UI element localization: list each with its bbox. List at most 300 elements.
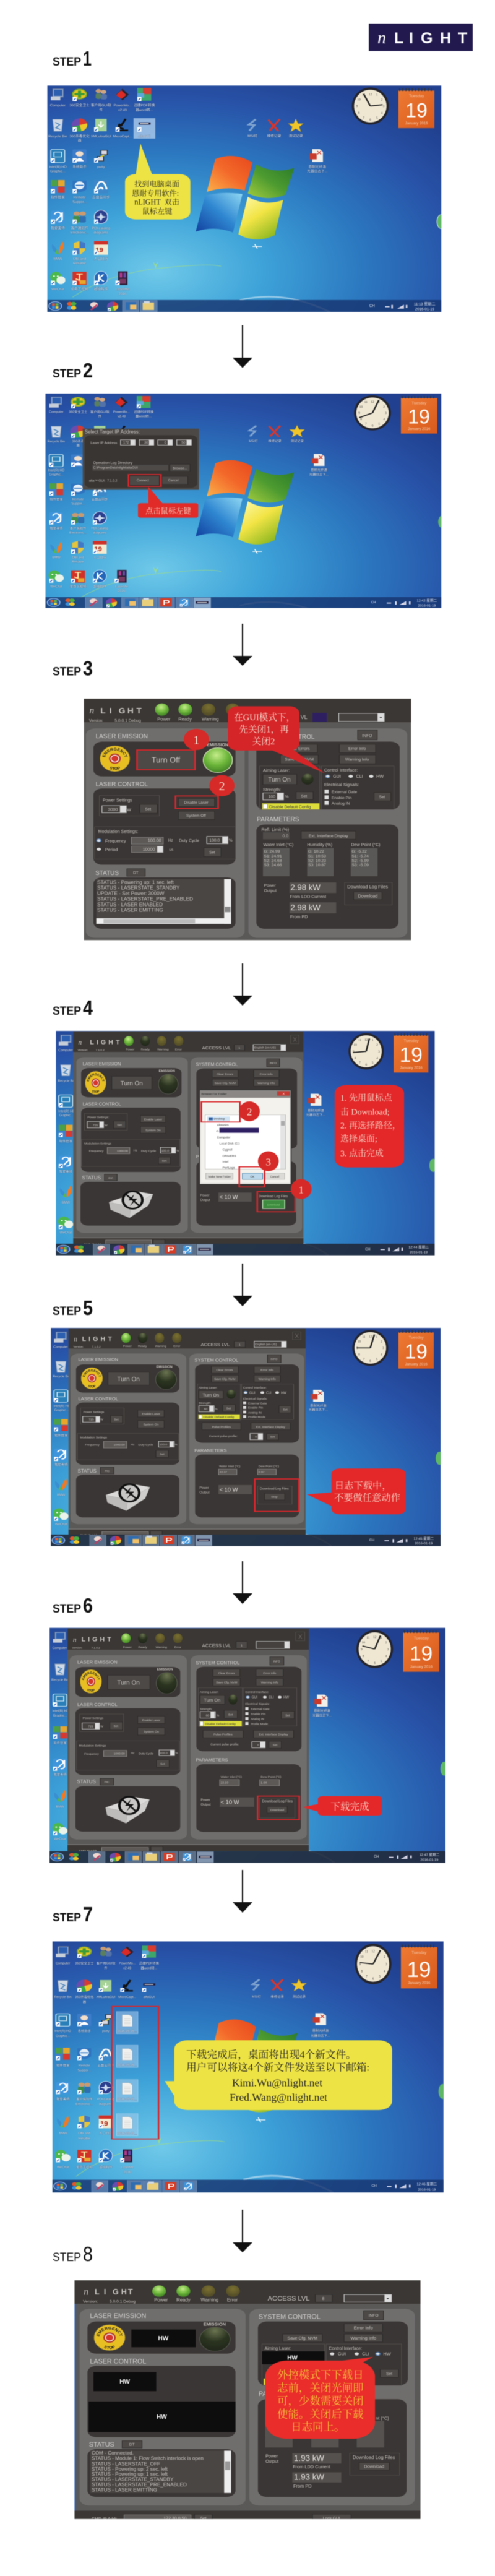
panel: parameters: Power (264, 884, 276, 888)
panel: laser control: Hz (168, 838, 173, 843)
panel: laser control: Enable Laser (142, 1413, 160, 1416)
panel: laser control: Power Settings (83, 1717, 104, 1720)
screenshot: step 3 laser GUI (84, 699, 411, 940)
panel: parameters: From PD (290, 915, 308, 920)
panel: left column (71, 1353, 186, 1524)
arrow 3 (233, 963, 252, 1006)
calendar: Tuesday (411, 401, 427, 405)
desktop icons column: 光器日志下... (312, 1713, 332, 1718)
panel: laser emission (81, 1061, 181, 1097)
panel: status log: STATUS - LASERSTATE_STANDBY (97, 885, 180, 890)
GUI bottom strip: 172.30.0.50 (163, 2517, 187, 2521)
panel: system control: External Gate (248, 1402, 267, 1405)
panel: laser control: 1000.00 (114, 1752, 125, 1756)
desktop icon labels: 云盘云同步 (98, 2062, 114, 2067)
desktop icon labels: PowerMo... (114, 104, 132, 108)
dialog: browse for folder: Browse For Folder (202, 1093, 227, 1096)
panel: laser control: Set (160, 1453, 165, 1457)
dialog: select target IP address: Laser IP Address (90, 441, 118, 445)
desktop icon labels: 客户用GUI软 (91, 103, 111, 108)
callout: red downloading warning (307, 1468, 406, 1514)
panel: laser emission: LASER EMISSION (79, 1357, 118, 1363)
panel: laser control: Set (160, 1762, 165, 1766)
desktop icon labels: 2016 (124, 2171, 131, 2174)
step label 6: STEP (53, 1603, 81, 1616)
panel: laser control: System Off (186, 814, 206, 818)
calendar: 19 (405, 1341, 428, 1364)
step label 8: 8 (83, 2242, 93, 2265)
desktop icon labels: 爱奇艺视频 (76, 2165, 93, 2169)
desktop icon labels: 超级软件 (99, 2165, 113, 2169)
panel: parameters: Output (264, 889, 277, 894)
panel: system control: Set (228, 1713, 233, 1717)
taskbar: CH (372, 2184, 377, 2188)
desktop icon labels: putty (102, 2030, 110, 2033)
panel: system control: CLI (356, 774, 363, 779)
panel: status log: STATUS - LASERSTATE_PRE_ENABLED (97, 896, 193, 902)
icon: windows logo (72, 460, 330, 618)
dialog: select target IP address: 30 (144, 441, 148, 445)
panel: system control: Aiming Laser: (265, 2346, 291, 2351)
panel: laser control: W (100, 1418, 103, 1422)
panel: laser control: HW (157, 2414, 167, 2421)
desktop icon labels: Remote (74, 196, 86, 200)
panel: laser control: % (176, 1752, 178, 1755)
taskbar (51, 1535, 441, 1546)
panel: parameters: Output (200, 1199, 210, 1202)
marker 2: 2 (219, 780, 225, 793)
panel: system control: 100 (269, 795, 275, 799)
dialog: select target IP address: 172 (123, 441, 129, 445)
marker 1 (291, 1179, 312, 1199)
panel: system control: Strength: (263, 788, 281, 793)
panel: left column (76, 1057, 188, 1233)
step label 1: 1 (83, 47, 92, 70)
screenshot: step 2 desktop with dialog (45, 394, 446, 618)
panel: parameters: < 10 W (220, 1194, 238, 1200)
taskbar: CH (365, 1247, 370, 1251)
desktop icon labels: Intel(R) HD (48, 469, 64, 473)
top bar: ACCESS LVL (202, 1045, 231, 1051)
desktop icons column: Computer (58, 1049, 73, 1053)
desktop icon labels: LaserMe (115, 585, 128, 588)
desktop icons column (58, 1035, 325, 1234)
step label 6: 6 (83, 1594, 93, 1617)
top bar: Warning (157, 1048, 169, 1051)
panel: laser control: System On (144, 1730, 159, 1734)
taskbar: CH (374, 1855, 379, 1859)
panel: parameters: S2: -5.99 (351, 859, 369, 863)
panel: system control: Turn On (203, 1392, 219, 1398)
panel: laser emission: EMISSION (207, 743, 228, 747)
clock (352, 87, 389, 124)
dialog: select target IP address: alta™ GUI: 7.1.0.2 (89, 479, 118, 483)
panel: system control: Set (301, 795, 307, 799)
panel: system control: SYSTEM CONTROL (194, 1358, 238, 1363)
panel: status log: STATUS (95, 870, 119, 877)
taskbar: 2016-01-19 (415, 308, 434, 312)
desktop icons column: 软件管家 (53, 1740, 67, 1745)
panel: parameters (196, 1154, 296, 1226)
step label 8 (53, 2242, 93, 2265)
panel: system control: INFO (273, 1660, 280, 1663)
calendar (401, 396, 437, 434)
panel: laser control: 100.00 (148, 838, 161, 843)
new files highlighted (112, 2007, 158, 2139)
top bar: 7.1.0.2 (96, 1049, 105, 1052)
panel: system control: Warning Info (259, 1377, 276, 1381)
desktop icon labels: 我爱美师 (56, 2096, 70, 2101)
desktop icon labels: 2016 (118, 589, 125, 593)
desktop icon labels: 软件管家 (51, 195, 65, 200)
desktop icons column: Intel(R) HD (53, 1710, 69, 1713)
panel: system control: Clear Errors (287, 747, 310, 751)
callout: yellow send files by email: Kimi.Wu@nlight.net (232, 2077, 322, 2089)
desktop icon labels: Reliable (73, 262, 86, 265)
panel: parameters: PARAMETERS (259, 2390, 304, 2398)
screenshot: step 1 desktop (48, 85, 446, 312)
desktop icon labels: diagrams (94, 231, 108, 235)
taskbar: 2016-01-19 (418, 2188, 436, 2192)
desktop icon labels: 恩耐光纤激 (309, 164, 326, 169)
desktop icon labels: 爱奇艺视频 (70, 584, 87, 588)
panel: laser control: % (229, 838, 233, 843)
panel: system control: Aiming Laser: (263, 768, 290, 773)
arrow 4 (233, 1264, 252, 1306)
desktop icons column: 软件管家 (59, 1139, 73, 1144)
dialog: browse for folder: PerfLogs (223, 1166, 235, 1170)
desktop icon labels: alfaGUI (144, 1996, 155, 1999)
desktop icons column (53, 1332, 328, 1527)
desktop icon labels: Reliable (79, 2137, 90, 2140)
panel: system control: Set (386, 2372, 392, 2376)
top bar: ACCESS LVL (202, 1643, 231, 1648)
desktop gadget (436, 1452, 443, 1465)
dialog: browse for folder: Cygnol (223, 1148, 232, 1152)
callout: yellow find software: 鼠标左键 (142, 207, 172, 216)
desktop icon labels: Electronic... (75, 2103, 93, 2106)
calendar: Tuesday (409, 94, 424, 98)
callout: red download complete: 下载完成 (330, 1801, 369, 1812)
top bar: n (89, 705, 94, 716)
desktop icon labels: Recycle Bin (48, 440, 65, 444)
top bar (74, 2280, 421, 2304)
GUI bottom strip: CMD IP Addr (84, 1243, 102, 1247)
dialog: browse for folder: OK (251, 1175, 255, 1178)
callout: yellow send files by email (165, 2040, 392, 2110)
panel: laser control (81, 1101, 181, 1172)
desktop icon labels: OBI and (78, 2132, 90, 2135)
panel: system control: INFO (369, 2314, 379, 2318)
callout: red downloading warning: 不要做任意动作 (334, 1493, 400, 1504)
marker 2 (209, 775, 235, 796)
panel: system control: Electrical Signals: (245, 1702, 270, 1706)
desktop icon labels: Remote (79, 2064, 90, 2067)
taskbar: CH (369, 304, 375, 308)
step label 7: 7 (83, 1903, 93, 1926)
panel: parameters: Water Inlet (°C) (221, 1775, 242, 1779)
desktop icon labels: WeChat (51, 288, 64, 291)
desktop icon labels: diagrams (93, 531, 107, 535)
panel: system control: GUI (252, 1696, 257, 1700)
panel: status: STATUS (82, 1175, 101, 1181)
panel: laser control: Frequency (105, 838, 126, 843)
callout: yellow find software: 恩耐专用软件: (132, 188, 179, 197)
panel: parameters: 0.97 (259, 1471, 265, 1475)
top bar: ACCESS LVL (268, 2295, 309, 2302)
dialog: select target IP address: 0 (165, 441, 166, 445)
panel: system control: Strength: (199, 1402, 211, 1405)
top bar: n (79, 1039, 82, 1046)
desktop icon labels: LaserMe (116, 288, 129, 291)
panel: laser control: Hz (134, 1149, 137, 1153)
calendar (403, 1630, 439, 1672)
desktop icons column: Graphic... (53, 1714, 67, 1718)
step label 8: STEP (53, 2251, 81, 2264)
desktop icons column: Computer (53, 1647, 67, 1650)
panel: parameters: 22.37 (220, 1471, 227, 1475)
panel: parameters: 22.10 (221, 1781, 228, 1785)
panel: system control: Electrical Signals: (243, 1397, 267, 1401)
top bar: LIGHT (90, 1040, 123, 1046)
dialog: browse for folder (199, 1090, 291, 1187)
desktop icon labels: PDI catalog (97, 2098, 114, 2101)
panel: status: STATUS (77, 1779, 96, 1785)
panel: laser control: Period (105, 847, 118, 852)
marker 3 (258, 1152, 279, 1171)
logo: nLIGHT (369, 24, 473, 51)
calendar (398, 1330, 434, 1369)
panel: parameters: Download Log Files (353, 2455, 395, 2460)
panel: parameters: 0.0 (283, 834, 288, 838)
desktop icon labels: 360杀毒优化 (75, 1994, 94, 1999)
dialog: browse for folder: Desktop (213, 1118, 225, 1121)
step label 5 (53, 1296, 93, 1319)
panel: parameters: Stop (271, 1496, 278, 1499)
panel: right column (189, 1353, 304, 1524)
panel: laser emission: LASER EMISSION (90, 2312, 146, 2320)
panel: laser control: Frequency (89, 1150, 104, 1153)
panel: laser control: Modulation Settings (84, 1142, 112, 1145)
desktop icon labels: 器word转... (136, 413, 152, 418)
top bar (67, 1629, 309, 1650)
desktop icon labels: OBI and (72, 556, 84, 560)
panel: status: PIC (105, 1781, 110, 1784)
desktop icons column: 恩耐光纤激 (308, 1108, 324, 1113)
panel: parameters: Download Log Files (347, 884, 388, 889)
panel: system control: % (217, 1713, 219, 1717)
callout: yellow send files by email: Fred.Wang@nlight.net (230, 2091, 327, 2103)
taskbar: 12:47 星期二 (420, 1853, 440, 1857)
step label 4 (53, 996, 93, 1019)
GUI window (73, 1032, 303, 1244)
panel: parameters: Dew Point (°C) (259, 1465, 279, 1468)
desktop icon labels: 360杀毒优化 (69, 134, 90, 139)
panel: system control: Enable Pin (248, 1406, 263, 1410)
panel: laser control: 100.0 (209, 838, 220, 843)
calendar: January 2016 (408, 428, 431, 431)
new files highlighted: 2016-05-05... (118, 2064, 137, 2067)
clock (354, 395, 391, 431)
taskbar: 12:45 星期二 (413, 1536, 434, 1541)
panel: laser control: Set (209, 851, 215, 855)
callout: red hardware mode instructions: 日志同上。 (291, 2421, 345, 2433)
panel: laser control: us (169, 848, 173, 852)
step label 1: STEP (53, 56, 81, 69)
calendar: Tuesday (411, 1951, 427, 1955)
desktop icon labels: PDI catalog (91, 527, 108, 530)
dialog: browse for folder: Local Disk (C:) (220, 1142, 240, 1145)
desktop icon labels: 我爱美师 (51, 225, 65, 230)
step label 5: STEP (53, 1305, 81, 1318)
icon: windows logo (72, 156, 330, 312)
panel: system control: Ext. Interface Display (256, 1425, 285, 1429)
desktop icons column (51, 1632, 332, 1841)
panel: system control: Save Cfg. NVM (214, 1377, 235, 1381)
panel: status log (93, 869, 236, 929)
desktop icon labels: MSI灯 (252, 1994, 262, 1999)
panel: laser control: Enable Laser (142, 1718, 160, 1722)
panel: parameters: S1: -5.74 (351, 854, 369, 858)
panel: system control: HW (283, 1696, 290, 1700)
calendar: January 2016 (400, 1066, 423, 1070)
panel: parameters: From LDD Current (293, 2464, 330, 2470)
panel: laser control: Duty Cycle (179, 839, 199, 843)
taskbar: 11:13 星期二 (414, 302, 436, 307)
calendar: January 2016 (408, 1981, 431, 1985)
taskbar: 12:42 星期二 (417, 599, 437, 603)
panel: parameters: S1: 24.91 (264, 854, 282, 858)
panel: system control: Warning Info (257, 1082, 275, 1085)
clock (356, 1630, 393, 1668)
desktop icon labels: Graphic... (49, 473, 63, 476)
desktop icon labels (48, 410, 329, 593)
taskbar (50, 1851, 446, 1863)
desktop icon labels: MicroCapt... (118, 1996, 136, 1999)
panel: system control: Analog IN (248, 1411, 262, 1415)
panel: status (80, 1174, 181, 1226)
top bar: Ready (138, 1345, 147, 1348)
top bar: Error (173, 1345, 181, 1348)
panel: laser control: Power Settings (103, 798, 132, 803)
panel: parameters: Download Log Files (260, 1488, 289, 1491)
panel: system control: Electrical Signals: (324, 783, 359, 788)
desktop icon labels: Suppor... (72, 200, 87, 204)
top bar: Error (227, 2297, 238, 2302)
top bar: VL (301, 714, 308, 720)
desktop icon labels: PDI catalog (92, 226, 110, 230)
panel: system control: Analog IN (251, 1718, 264, 1721)
panel: status log: STATUS - LASERSTATE_STANDBY (92, 2477, 174, 2483)
callout: red hardware mode instructions: 外控模式下下载日 (277, 2369, 364, 2381)
top bar: Power (126, 1048, 135, 1051)
desktop icon labels: Reliable (72, 560, 84, 564)
desktop icon labels (54, 1960, 330, 2174)
desktop icon labels: 器word转... (136, 107, 153, 112)
taskbar (48, 300, 441, 312)
arrow 7 (233, 2210, 252, 2252)
desktop icon labels: 超级软件 (94, 286, 108, 291)
panel: laser control: Modulation Settings: (98, 829, 138, 834)
top bar: ACCESS LVL (200, 1342, 230, 1348)
GUI bottom strip (74, 2511, 421, 2522)
panel: system control: Warning Info (345, 758, 369, 762)
desktop icons column: Intel(R) HD (54, 1405, 71, 1408)
panel: system control: Enable Pin (332, 796, 352, 800)
step label 5: 5 (83, 1296, 93, 1319)
top bar: Version: (73, 1345, 84, 1348)
desktop icons column: Intel(R) HD (58, 1109, 75, 1113)
panel: system control: Set (226, 1407, 231, 1411)
step label 3: STEP (53, 666, 81, 678)
callout: red three-step instructions: 选择桌面; (340, 1134, 377, 1144)
logo: nLIGHT: n (377, 28, 386, 48)
panel: laser control: W (127, 808, 131, 812)
callout: yellow send files by email: 用户可以将这4个新文件发送至以下邮箱: (186, 2062, 369, 2074)
desktop icon labels: Recycle Bin (54, 1996, 72, 1999)
callout: red hardware mode instructions: 志前，关闭光闸即 (277, 2382, 364, 2394)
panel: laser control: LASER CONTROL (96, 782, 148, 788)
desktop gadget (439, 2084, 447, 2099)
desktop icon labels: XMLultraGUI (91, 135, 111, 139)
panel: parameters: Download (358, 894, 377, 899)
desktop icon labels: OBI and (73, 257, 86, 261)
panel: laser control: Duty Cycle (139, 1752, 153, 1755)
panel: parameters: Download (364, 2463, 384, 2469)
panel: system control: Save Cfg. NVM (288, 2337, 317, 2341)
top bar: Error (175, 1048, 182, 1051)
screenshot: step 6 download complete (50, 1628, 448, 1863)
GUI bottom strip: Set (200, 2517, 207, 2521)
desktop icons column: WeChat (55, 1523, 67, 1527)
panel: left column (86, 728, 244, 938)
top bar: 7.1.0.2 (92, 1345, 101, 1348)
panel: system control: Error Info (348, 747, 366, 751)
panel: parameters: Download (270, 1809, 284, 1812)
GUI bottom strip (67, 1845, 309, 1853)
panel: laser emission: LASER EMISSION (83, 1061, 121, 1066)
calendar: Tuesday (409, 1336, 424, 1340)
panel: parameters: Power (200, 1194, 210, 1198)
taskbar (56, 1244, 435, 1256)
panel: system control: Pulse Profiles (213, 1733, 233, 1736)
panel: parameters: Output (199, 1491, 210, 1494)
desktop icon labels: Suppor... (71, 502, 85, 506)
top bar (73, 1032, 303, 1052)
desktop icon labels: PowerMo... (113, 411, 130, 415)
marker 1: 1 (193, 733, 199, 747)
desktop icon labels: BMW (54, 257, 62, 261)
taskbar: 12:46 星期二 (417, 2182, 437, 2186)
dialog: browse for folder: Intel (223, 1160, 228, 1164)
marker 3: 3 (265, 1156, 271, 1168)
panel: laser control: Set (114, 1418, 119, 1422)
panel: status log: DT (129, 2443, 135, 2447)
panel: parameters: From PD (293, 2483, 312, 2489)
desktop icon labels: 维修记录 (270, 1994, 284, 1999)
panel: status log: STATUS - Module 1: Flow Switch interlock is open (92, 2456, 204, 2462)
panel: system control: Set (285, 1714, 290, 1718)
panel: system control: Set (379, 795, 385, 799)
panel: status: STATUS (78, 1468, 97, 1474)
dialog: select target IP address: Cancel (168, 479, 178, 483)
desktop icon labels: 光器日志下... (307, 169, 328, 174)
top bar: English (en-US) (255, 1343, 277, 1346)
panel: system control: SYSTEM CONTROL (196, 1660, 239, 1665)
desktop icons column: 我爱美师 (53, 1772, 67, 1777)
desktop gadget (438, 515, 442, 528)
panel: parameters: 1.64 (260, 1781, 267, 1785)
